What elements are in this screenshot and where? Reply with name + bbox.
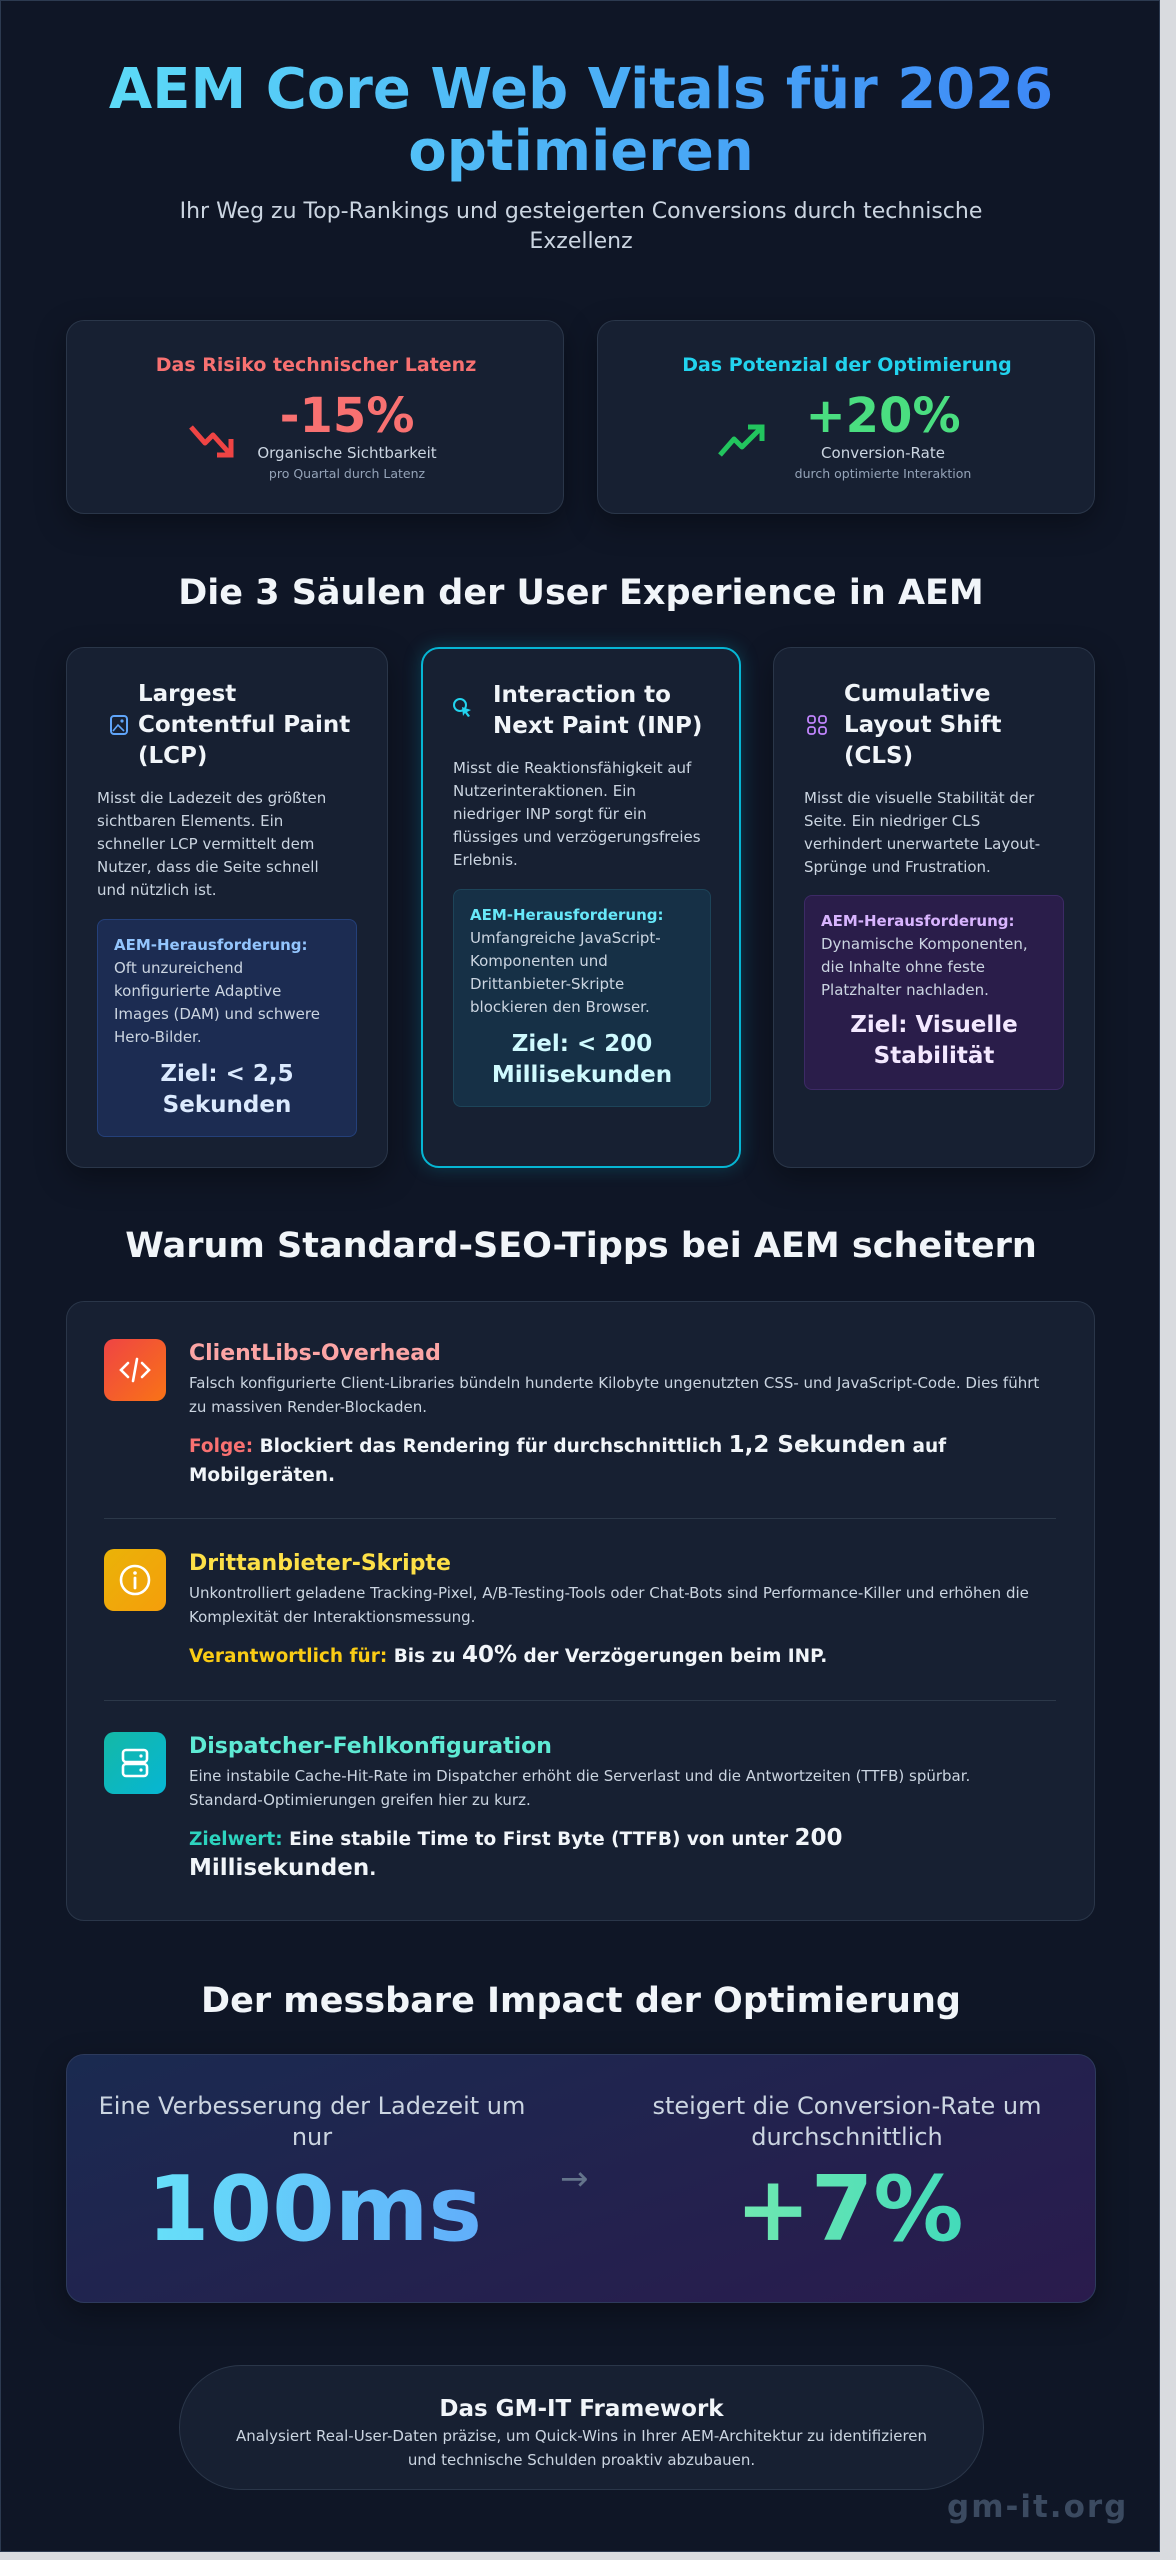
CLS challenge box: Ziel: Visuelle Stabilität (850, 1012, 1018, 1069)
stat +20%: +20% (805, 388, 961, 444)
CLS challenge box: AEM-Herausforderung: (821, 912, 1014, 930)
CLS challenge box (804, 895, 1064, 1090)
LCP challenge box (97, 919, 357, 1137)
panel: risk stat (66, 320, 564, 514)
title (41, 59, 1121, 183)
item: dispatcher: Zielwert: Eine stabile Time to First Byte (TTFB) von unter 200 Millisekunden. (189, 1825, 843, 1881)
CLS title: Cumulative Layout Shift (CLS) (844, 681, 1001, 769)
panel: LCP (66, 647, 388, 1168)
LCP challenge box: AEM-Herausforderung: (114, 936, 308, 954)
CLS description: Misst die visuelle Stabilität der Seite. Ein niedriger CLS verhindert unerwartete Layout-Sprünge und Frustration. (804, 789, 1040, 876)
LCP challenge box: Oft unzureichend konfigurierte Adaptive Images (DAM) und schwere Hero-Bilder. (114, 959, 320, 1046)
icon: trend down (189, 425, 234, 458)
heading: 3 pillars: Die 3 Säulen der User Experience in AEM (178, 573, 984, 613)
item: third-party scripts: Drittanbieter-Skripte (189, 1551, 451, 1576)
stat -15%: Organische Sichtbarkeit (257, 444, 437, 462)
watermark: gm-it.org (947, 2489, 1128, 2525)
item: dispatcher: Dispatcher-Fehlkonfiguration (189, 1734, 552, 1759)
subtitle: Ihr Weg zu Top-Rankings und gesteigerten Conversions durch technische Exzellenz (180, 199, 982, 254)
INP challenge box (453, 889, 711, 1107)
risk heading: Das Risiko technischer Latenz (156, 354, 476, 376)
INP description: Misst die Reaktionsfähigkeit auf Nutzerinteraktionen. Ein niedriger INP sorgt für ein flüssiges und verzögerungsfreies Erlebnis. (453, 759, 701, 869)
stat +20%: durch optimierte Interaktion (795, 466, 971, 481)
panel: potential stat (597, 320, 1095, 514)
item: third-party scripts: Verantwortlich für: Bis zu 40% der Verzögerungen beim INP. (189, 1642, 827, 1668)
title: optimieren (408, 119, 754, 184)
item: third-party scripts (189, 1551, 1029, 1668)
stat -15%: pro Quartal durch Latenz (269, 466, 425, 481)
item: ClientLibs (189, 1341, 1039, 1486)
icon: grid (807, 715, 827, 735)
item: dispatcher: Eine instabile Cache-Hit-Rate im Dispatcher erhöht die Serverlast und die Antwortzeiten (TTFB) spürbar. Standard-Optimierungen greifen hier zu kurz. (189, 1767, 970, 1809)
icon: pointer (453, 698, 471, 717)
item: ClientLibs: Falsch konfigurierte Client-Libraries bündeln hunderte Kilobyte ungenutzten CSS- und JavaScript-Code. Dies führt zu massiven Render-Blockaden. (189, 1374, 1039, 1416)
CLS challenge box: Dynamische Komponenten, die Inhalte ohne feste Platzhalter nachladen. (821, 935, 1028, 999)
stat +20% (795, 388, 971, 481)
INP challenge box: Ziel: < 200 Millisekunden (492, 1031, 672, 1088)
potential heading: Das Potenzial der Optimierung (682, 354, 1012, 376)
big stat 100ms: 100ms (147, 2157, 482, 2262)
INP challenge box: Umfangreiche JavaScript-Komponenten und Drittanbieter-Skripte blockieren den Browser. (470, 929, 661, 1016)
stat -15%: -15% (280, 388, 414, 444)
INP title: Interaction to Next Paint (INP) (493, 682, 702, 739)
icon: server (104, 1732, 166, 1794)
big stat +7% (627, 2155, 1072, 2265)
impact right text: steigert die Conversion-Rate um durchschnittlich (652, 2092, 1042, 2151)
item: ClientLibs: Folge: Blockiert das Rendering für durchschnittlich 1,2 Sekunden auf Mobilgeräten. (189, 1432, 946, 1486)
arrow: → (560, 2159, 588, 2199)
big stat +7%: +7% (735, 2157, 964, 2262)
title: AEM Core Web Vitals für 2026 (109, 57, 1053, 122)
INP challenge box: AEM-Herausforderung: (470, 906, 664, 924)
stat +20%: Conversion-Rate (821, 444, 945, 462)
item: ClientLibs: ClientLibs-Overhead (189, 1341, 441, 1366)
icon: code (104, 1339, 166, 1401)
heading: impact: Der messbare Impact der Optimierung (201, 1981, 961, 2021)
item: third-party scripts: Unkontrolliert geladene Tracking-Pixel, A/B-Testing-Tools oder Chat-Bots sind Performance-Killer und erhöhen die Komplexität der Interaktionsmessung. (189, 1584, 1029, 1626)
panel: INP (421, 647, 741, 1168)
LCP description: Misst die Ladezeit des größten sichtbaren Elements. Ein schneller LCP vermittelt dem Nutzer, dass die Seite schnell und nützlich ist. (97, 789, 326, 899)
icon: image (110, 715, 128, 735)
LCP title: Largest Contentful Paint (LCP) (138, 681, 350, 769)
icon: trend up (718, 424, 764, 457)
panel: failures (66, 1301, 1095, 1921)
icon: info (104, 1549, 166, 1611)
callout: framework: Analysiert Real-User-Daten präzise, um Quick-Wins in Ihrer AEM-Architektur zu identifizieren und technische Schulden proaktiv abzubauen. (236, 2427, 927, 2469)
callout: framework (179, 2365, 984, 2490)
impact left text: Eine Verbesserung der Ladezeit um nur (99, 2092, 525, 2151)
stat -15% (257, 388, 437, 481)
callout: framework: Das GM-IT Framework (439, 2396, 724, 2422)
panel: CLS (773, 647, 1095, 1168)
item: dispatcher (189, 1734, 970, 1881)
LCP challenge box: Ziel: < 2,5 Sekunden (160, 1061, 294, 1118)
panel: impact (66, 2054, 1096, 2303)
heading: why SEO tips fail: Warum Standard-SEO-Tipps bei AEM scheitern (125, 1226, 1037, 1266)
